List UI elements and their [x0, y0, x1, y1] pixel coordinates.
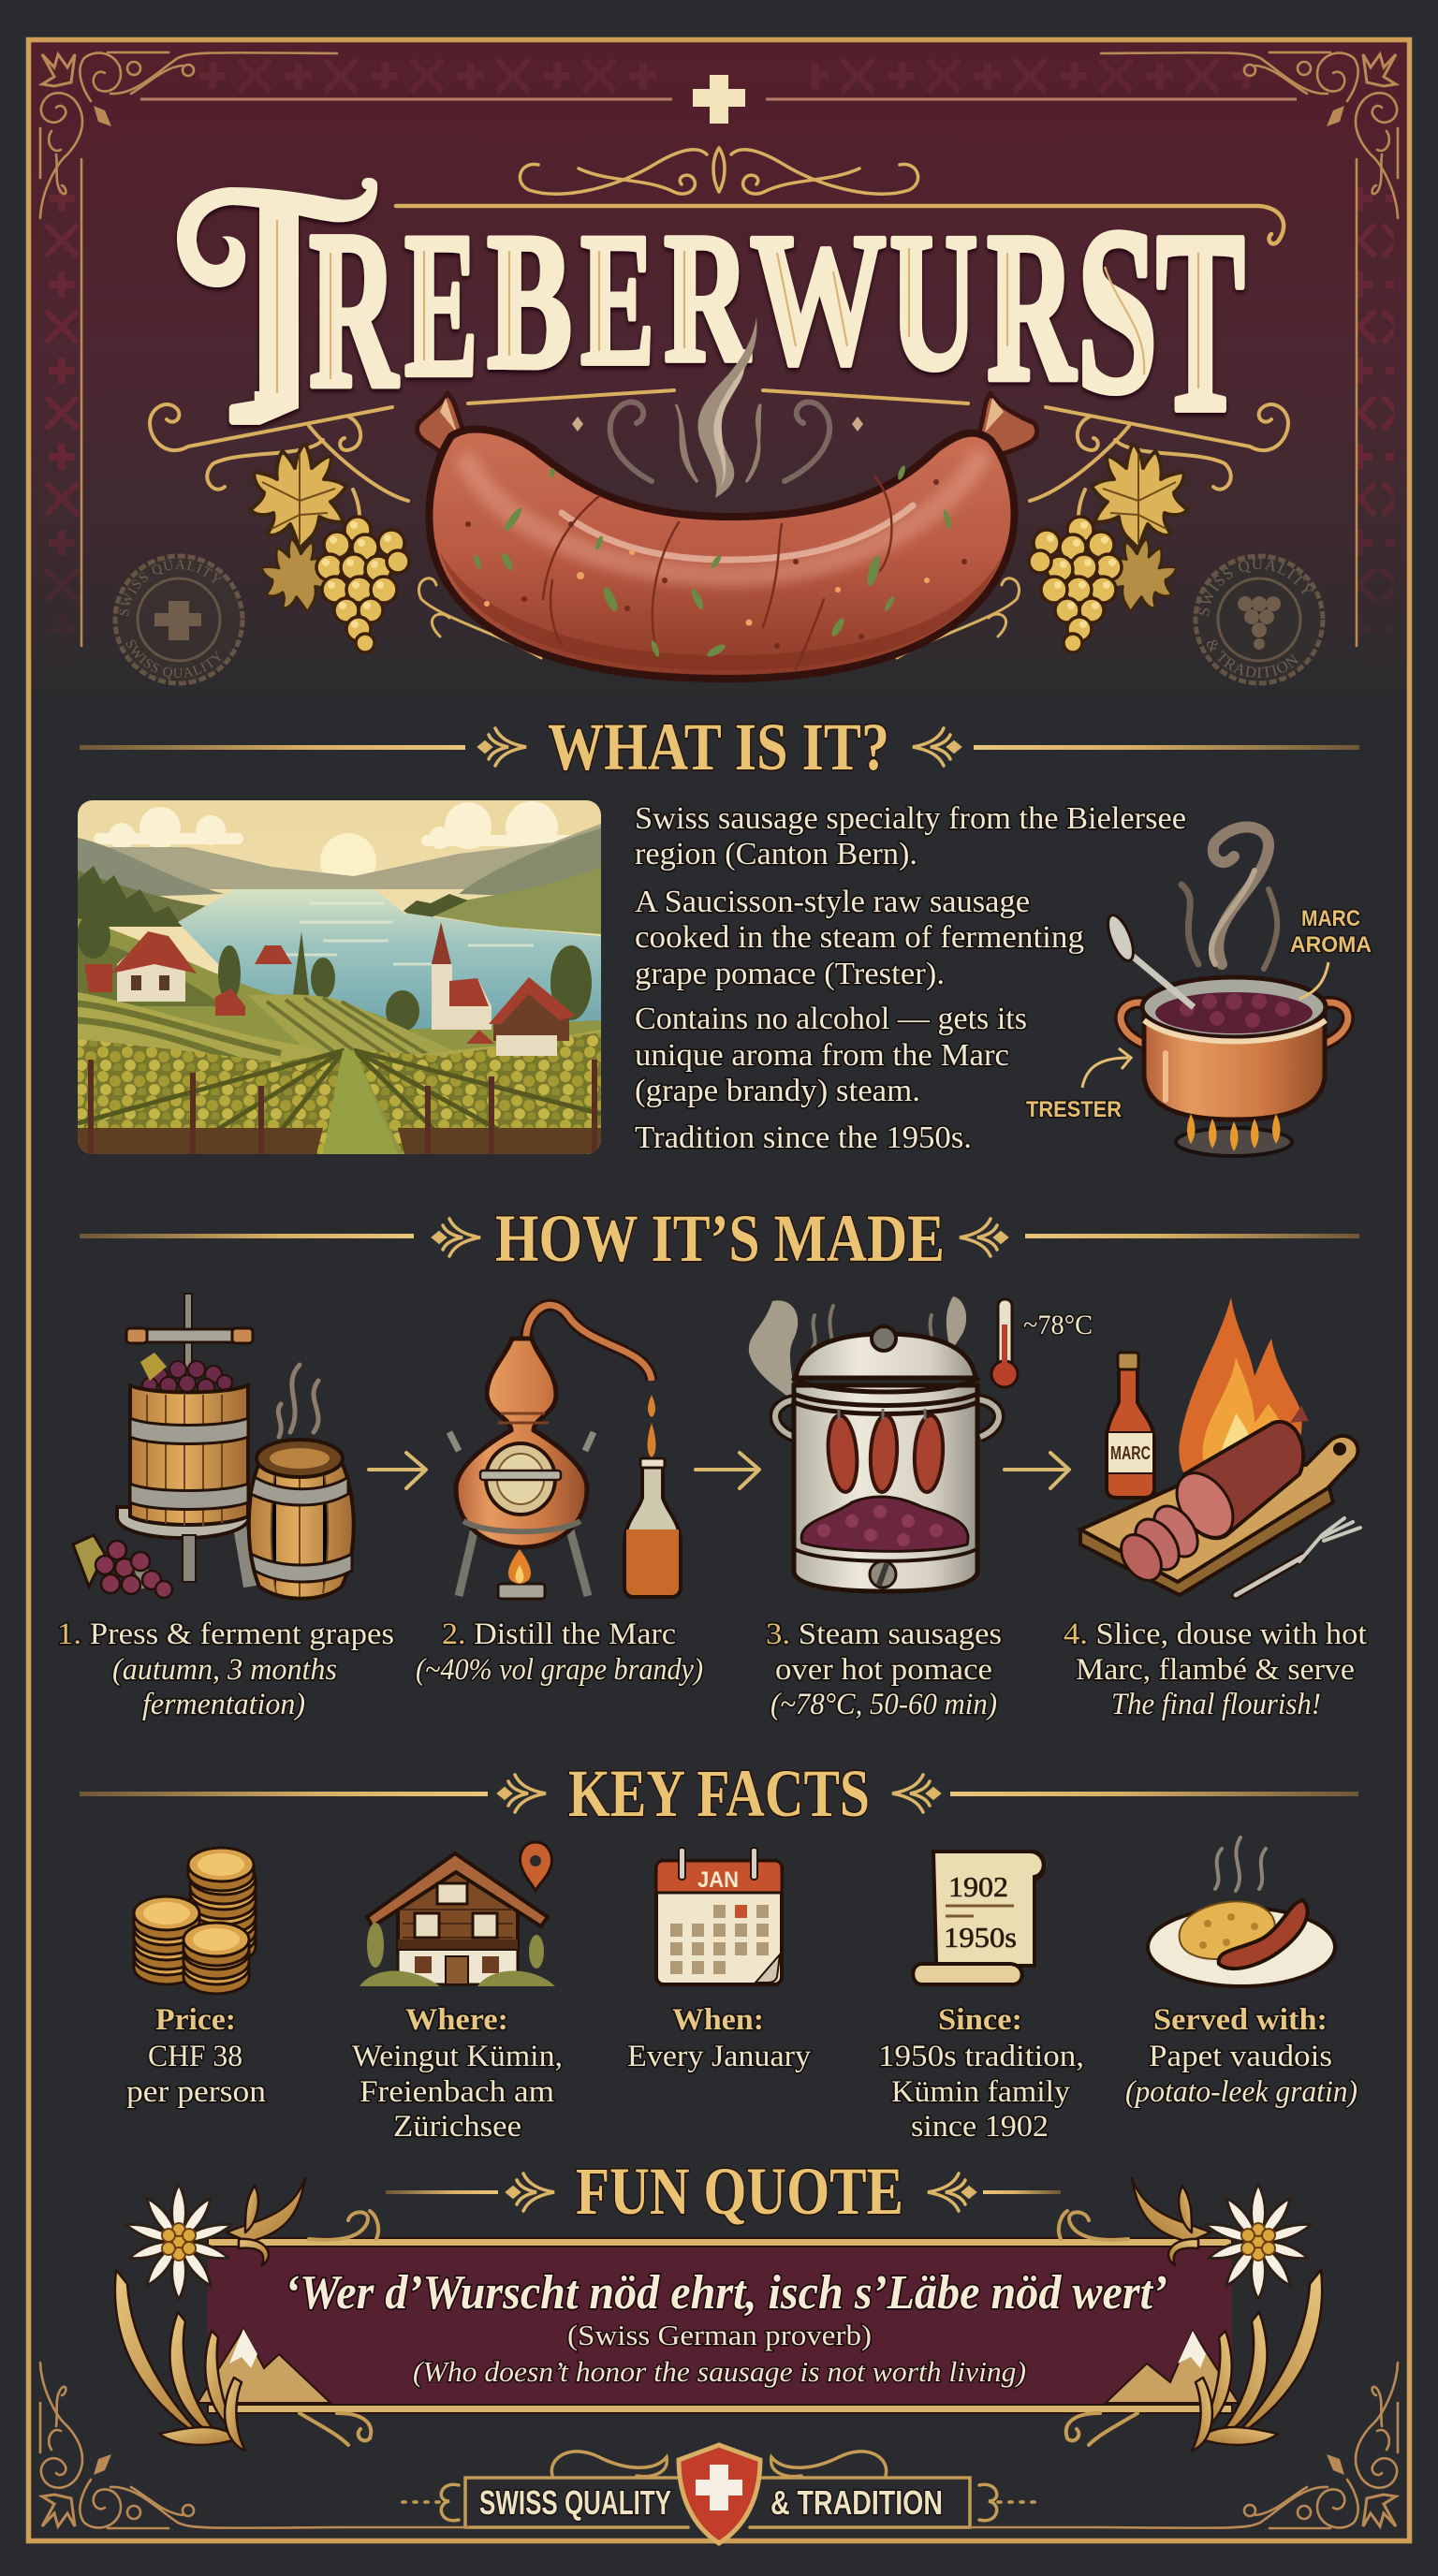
title: TREBERWURST: W	[750, 195, 887, 404]
step 2 caption: 2. Distill the Marc	[442, 1617, 676, 1651]
quote banner: (Who doesn’t honor the sausage is not worth living)	[413, 2355, 1026, 2388]
press stand	[140, 1521, 250, 1587]
clouds	[94, 801, 571, 849]
still stand	[459, 1516, 588, 1596]
fork	[1236, 1557, 1303, 1595]
sausage herbs and specks	[472, 464, 953, 659]
description text: unique aroma from the Marc	[635, 1038, 1009, 1073]
landscape illustration	[77, 800, 601, 1154]
step 3 caption: (~78°C, 50-60 min)	[770, 1688, 997, 1721]
description text	[635, 801, 1186, 1155]
since: Kümin family	[891, 2075, 1071, 2109]
quote text: ‘Wer d’Wurscht nöd ehrt, isch s’Läbe nöd wert’	[285, 2266, 1167, 2320]
title: TREBERWURST: E	[404, 191, 478, 420]
pot burner	[1176, 1128, 1292, 1156]
since	[878, 2003, 1084, 2144]
steamer body	[794, 1385, 977, 1591]
served with: Papet vaudois	[1149, 2040, 1332, 2073]
location pin	[521, 1842, 551, 1891]
title: TREBERWURST: T	[1156, 177, 1245, 465]
step captions	[57, 1617, 1367, 1721]
press grapes	[142, 1361, 232, 1396]
lake	[178, 889, 601, 1030]
where: Zürichsee	[393, 2110, 521, 2144]
lower title flourishes	[150, 390, 1288, 450]
price: CHF 38	[148, 2040, 242, 2073]
pomace	[801, 1497, 968, 1551]
section heading: key facts	[80, 1756, 1358, 1831]
where	[352, 2003, 563, 2144]
screw press handle	[184, 1294, 192, 1368]
flames	[1179, 1297, 1302, 1498]
bottom badge: swiss quality and tradition: & TRADITION	[770, 2483, 943, 2522]
sausage highlights	[468, 461, 978, 576]
vine, leaves and grapes right	[1029, 417, 1231, 652]
step 1 steam	[278, 1365, 318, 1437]
burner flame	[498, 1584, 545, 1599]
pot body	[1144, 1011, 1325, 1120]
section heading: how it's made: HOW IT’S MADE	[495, 1201, 945, 1276]
first letter T with swash: T	[196, 134, 358, 491]
step 2: copper still icon	[449, 1305, 681, 1599]
pot steam	[1181, 827, 1277, 969]
seal left: SWISS QUALITY	[125, 640, 221, 680]
steamer handles	[775, 1399, 999, 1437]
step 4: flambe board icon: MARC	[1110, 1443, 1151, 1464]
step 1 caption: (autumn, 3 months	[112, 1653, 337, 1687]
maroon header background	[28, 39, 1410, 695]
icon: coins	[134, 1848, 256, 1994]
where: Where:	[405, 2003, 508, 2037]
description text: region (Canton Bern).	[635, 837, 917, 871]
step 2 caption	[416, 1617, 703, 1687]
houses	[117, 955, 185, 1002]
step 3: steam pot icon: ~78°C	[1023, 1310, 1093, 1340]
quote banner: (Swiss German proverb)	[567, 2319, 872, 2351]
sausage and slices	[1181, 1422, 1303, 1538]
since: since 1902	[911, 2110, 1049, 2144]
title: TREBERWURST: E	[580, 194, 654, 405]
since: Since:	[938, 2003, 1022, 2037]
served with	[1125, 2003, 1357, 2109]
step 4 caption: The final flourish!	[1111, 1688, 1321, 1721]
quote banner	[198, 2238, 1239, 2413]
icon: scroll with dates: 1950s	[944, 1921, 1017, 1954]
section heading: key facts: KEY FACTS	[568, 1756, 870, 1831]
section heading: how it's made	[80, 1201, 1359, 1276]
section heading: fun quote: FUN QUOTE	[576, 2154, 903, 2229]
vine, leaves and grapes left	[207, 417, 409, 652]
still body	[456, 1339, 587, 1547]
description text: Swiss sausage specialty from the Bielersee	[635, 801, 1186, 836]
served with: Served with:	[1153, 2003, 1328, 2037]
hills	[78, 918, 601, 1154]
board	[1080, 1488, 1333, 1595]
sausages	[825, 1414, 945, 1493]
icon: scroll with dates: 1902	[948, 1870, 1008, 1903]
icon: scroll with dates	[913, 1852, 1044, 1984]
forest on far shores	[78, 866, 468, 927]
pot labels: MARC	[1301, 906, 1360, 931]
swiss cross and top rules	[140, 75, 1297, 124]
price	[126, 2003, 266, 2109]
price: Price:	[155, 2003, 236, 2037]
section heading: fun quote	[386, 2154, 1061, 2229]
step 1 grapes	[73, 1535, 105, 1587]
description text: (grape brandy) steam.	[635, 1074, 920, 1108]
step 2 caption: (~40% vol grape brandy)	[416, 1653, 703, 1687]
step 4 caption	[1064, 1617, 1367, 1721]
title: TREBERWURST: B	[487, 193, 572, 410]
description text: grape pomace (Trester).	[635, 957, 945, 991]
step 1 caption: fermentation)	[142, 1688, 305, 1721]
steamer steam	[749, 1296, 966, 1399]
foreground vines	[78, 1039, 345, 1154]
icon: copper pot with steam: TRESTER	[1026, 1097, 1122, 1122]
step 4 caption: 4. Slice, douse with hot	[1064, 1617, 1367, 1651]
description text: cooked in the steam of fermenting	[635, 920, 1084, 955]
icon: plate with gratin and sausage	[1148, 1837, 1335, 1986]
swiss shield	[679, 2445, 760, 2543]
step 3 caption	[766, 1617, 1002, 1721]
icon: copper pot with steam	[1026, 827, 1372, 1156]
title: TREBERWURST: R	[987, 188, 1077, 426]
sausage ties	[417, 393, 1037, 459]
sausage illustration	[417, 393, 1037, 679]
title rule	[396, 206, 1284, 243]
since: 1950s tradition,	[878, 2040, 1084, 2073]
seal right: SWISS QUALITY	[1198, 558, 1313, 616]
seal right	[1193, 554, 1326, 685]
arrow 2	[696, 1453, 759, 1488]
still pipe	[526, 1305, 652, 1381]
title: TREBERWURST: R	[309, 185, 399, 435]
section heading: what is it: WHAT IS IT?	[548, 710, 889, 784]
description text: Tradition since the 1950s.	[635, 1120, 972, 1155]
step 1: press icon	[73, 1294, 354, 1599]
seal left	[112, 554, 245, 685]
brandy bottle	[624, 1462, 681, 1597]
description text: Contains no alcohol — gets its	[635, 1002, 1027, 1036]
lower header scrolls	[418, 578, 1020, 658]
step 4 caption: Marc, flambé & serve	[1076, 1653, 1355, 1687]
drops	[648, 1395, 655, 1458]
step 3 caption: 3. Steam sausages	[766, 1617, 1002, 1651]
steam above sausage	[572, 317, 863, 498]
description text: A Saucisson-style raw sausage	[635, 885, 1030, 919]
marc bottle	[1107, 1357, 1154, 1498]
steamer lid	[796, 1334, 976, 1378]
mountains	[198, 2329, 330, 2403]
step 1 caption	[57, 1617, 394, 1721]
bottom badge: swiss quality and tradition	[337, 2445, 1101, 2543]
icon: calendar	[656, 1848, 782, 1984]
badge frame	[337, 2452, 1101, 2527]
arrow 1	[369, 1453, 426, 1488]
bottom badge: swiss quality and tradition: SWISS QUALITY	[479, 2483, 671, 2522]
title inline accents	[277, 220, 1198, 393]
pot handles	[1121, 1003, 1348, 1044]
banner foliage and edelweiss right	[1059, 2178, 1322, 2451]
where: Freienbach am	[360, 2075, 554, 2109]
sausage wrinkles	[543, 477, 891, 669]
section heading: what is it	[80, 710, 1359, 784]
seal right: & TRADITION	[1207, 640, 1299, 678]
where: Weingut Kümin,	[352, 2040, 563, 2073]
spoon	[1128, 950, 1194, 1006]
key facts text	[126, 2003, 1357, 2144]
price: per person	[126, 2075, 266, 2109]
fermenting barrel	[249, 1462, 354, 1599]
arrow 3	[1005, 1453, 1069, 1488]
seal left: SWISS QUALITY	[120, 560, 223, 616]
icon: calendar: JAN	[697, 1867, 739, 1893]
title: TREBERWURST	[174, 178, 1247, 431]
step 4: flambe board icon	[1080, 1297, 1360, 1595]
title: TREBERWURST: S	[1077, 178, 1158, 442]
when: When:	[672, 2003, 764, 2037]
served with: (potato-leek gratin)	[1125, 2075, 1357, 2109]
step 1 caption: 1. Press & ferment grapes	[57, 1617, 394, 1651]
title: TREBERWURST: R	[664, 195, 751, 402]
thermometer	[998, 1299, 1012, 1372]
step 3: steam pot icon	[749, 1296, 1093, 1591]
title: TREBERWURST: U	[889, 193, 978, 411]
when	[627, 2003, 812, 2073]
step 3 caption: over hot pomace	[775, 1653, 992, 1687]
icon: chalet with location pin	[360, 1842, 555, 1986]
first letter T with swash	[174, 178, 380, 431]
icon: copper pot with steam: AROMA	[1290, 932, 1372, 958]
top flourish ornament	[520, 148, 918, 194]
press barrel	[130, 1385, 248, 1525]
banner foliage and edelweiss left	[115, 2178, 378, 2451]
when: Every January	[627, 2040, 812, 2073]
